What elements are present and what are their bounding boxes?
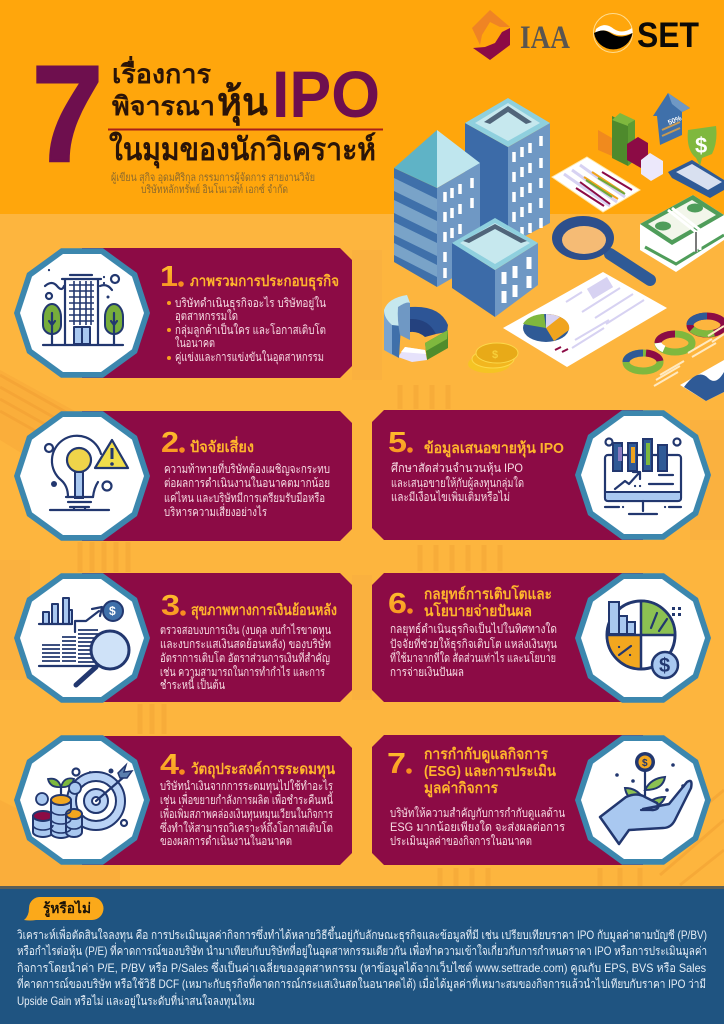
up arrow with 50% <box>653 93 690 145</box>
heading 7: การกำกับดูแลกิจการ <box>424 745 549 764</box>
front building <box>452 218 538 317</box>
number 3 <box>161 590 186 622</box>
icon: monitor with charts <box>575 410 711 540</box>
3D donut chart <box>384 295 448 362</box>
icon: office building <box>14 248 150 378</box>
pyramid-top building <box>394 130 480 287</box>
body 6: การจ่ายเงินปันผล <box>390 665 464 679</box>
panel: did you know footer <box>0 886 724 1024</box>
illustration: isometric city and finance objects <box>384 93 724 401</box>
icon: light bulb with warning <box>14 411 150 541</box>
body 5: และมีเงื่อนไขเพิ่มเติมหรือไม่ <box>391 488 510 504</box>
title: พิจารณา <box>112 91 215 121</box>
heading 5: ข้อมูลเสนอขายหุ้น IPO <box>424 440 564 458</box>
body 7: ESG มากน้อยเพียงใด จะส่งผลต่อการ <box>390 820 565 834</box>
SET logo <box>594 14 699 55</box>
body 5 <box>391 461 524 504</box>
heading 7 <box>424 745 557 798</box>
number 1 <box>160 261 184 293</box>
title: เรื่องการ <box>112 55 211 89</box>
body 7: บริษัทให้ความสำคัญกับการกำกับดูแลด้าน <box>390 806 565 821</box>
body 2 <box>164 460 330 519</box>
money stack <box>640 195 724 272</box>
body 4: ของผลการดำเนินงานในอนาคต <box>160 834 292 848</box>
number 5 <box>388 427 413 459</box>
heading 2: ปัจจัยเสี่ยง <box>190 436 254 456</box>
number 7 <box>387 748 412 780</box>
report with pie <box>503 272 667 367</box>
body text: Upside Gain หรือไม่ และอยู่ในระดับที่น่าสนใจลงทุนไหม <box>17 992 255 1009</box>
number 4: 4 <box>160 749 179 781</box>
title <box>32 38 383 191</box>
number 7: 7 <box>387 748 406 780</box>
small donuts <box>626 316 724 401</box>
title: IPO <box>272 57 380 131</box>
title: หุ้น <box>217 81 268 126</box>
heading 7: มูลค่ากิจการ <box>424 779 499 798</box>
body 6: กลยุทธ์ดำเนินธุรกิจเป็นไปในทิศทางใด <box>390 621 557 637</box>
heading 1: ภาพรวมการประกอบธุรกิจ <box>190 272 339 291</box>
panel: 2 risk factors <box>14 411 352 541</box>
icon: hand holding plant: $ <box>642 758 648 769</box>
IAA logo: IAA <box>520 20 570 56</box>
body 7: ประเมินมูลค่าของกิจการในอนาคต <box>390 834 532 849</box>
panel: 4 use of proceeds <box>14 735 352 865</box>
body 3 <box>160 623 331 692</box>
heading 6 <box>424 584 552 620</box>
panel: 6 growth strategy and dividend <box>372 573 711 703</box>
body 7 <box>390 806 565 849</box>
body text <box>17 926 707 1009</box>
coins: $ <box>492 349 498 361</box>
body 2: บริหารความเสี่ยงอย่างไร <box>164 503 267 519</box>
body 5: ศึกษาสัดส่วนจำนวนหุ้น IPO <box>391 461 523 476</box>
heading 3: สุขภาพทางการเงินย้อนหลัง <box>191 601 337 620</box>
icon: pie chart with coin <box>575 573 711 703</box>
heading 4: วัตถุประสงค์การระดมทุน <box>191 760 336 779</box>
bullets: บริษัทดำเนินธุรกิจอะไร บริษัทอยู่ใน <box>175 296 326 311</box>
author: บริษัทหลักทรัพย์ อินโนเวสท์ เอกซ์ จำกัด <box>141 182 288 196</box>
bullets: กลุ่มลูกค้าเป็นใคร และโอกาสเติบโต <box>175 322 326 338</box>
body 4: บริษัทนำเงินจากการระดมทุนไปใช้ทำอะไร <box>160 779 333 794</box>
body 6: ปัจจัยที่ช่วยให้ธุรกิจเติบโต แหล่งเงินทุน <box>390 635 557 652</box>
body 5: และเสนอขายให้กับผู้ลงทุนกลุ่มใด <box>391 476 524 491</box>
up arrow with 50%: 50% <box>667 115 683 127</box>
bullets: ในอนาคต <box>175 336 215 350</box>
panel: 7 ESG and valuation <box>372 735 711 865</box>
icon: pie chart with coin: $ <box>659 655 670 677</box>
panel: 1 business overview <box>14 248 352 378</box>
magnifier <box>552 216 650 280</box>
bar cubes <box>598 113 663 181</box>
tablet and dollar: $ <box>695 133 707 158</box>
body 6 <box>390 621 557 679</box>
body 3: ตรวจสอบงบการเงิน (งบดุล งบกำไรขาดทุน <box>160 623 331 638</box>
title: ในมุมของนักวิเคราะห์ <box>109 131 376 169</box>
body 3: ชำระหนี้ เป็นต้น <box>160 676 225 692</box>
body 3: เช่น ความสามารถในการทำกำไร และการ <box>160 665 325 679</box>
bullets <box>167 296 326 365</box>
body 2: ต่อผลการดำเนินงานในอนาคตมากน้อย <box>164 476 330 490</box>
body 6: ที่ใช้มาจากที่ใด สัดส่วนเท่าไร และนโยบาย <box>390 649 556 665</box>
number 3: 3 <box>161 590 180 622</box>
body 4: เพื่อเพิ่มสภาพคล่องเงินทุนหมุนเวียนในกิจการ <box>160 805 333 822</box>
body 4: ซึ่งทำให้สามารถวิเคราะห์ถึงโอกาสเติบโต <box>160 819 333 835</box>
number 6: 6 <box>388 588 407 620</box>
bullets: อุตสาหกรรมใด <box>175 309 238 324</box>
heading 7: (ESG) และการประเมิน <box>424 762 557 780</box>
number 6 <box>388 588 413 620</box>
number 1: 1 <box>160 261 178 293</box>
callout: did you know <box>24 897 104 920</box>
IAA logo <box>472 10 570 60</box>
title: 7 <box>32 38 103 191</box>
body 3: และงบกระแสเงินสดย้อนหลัง) ของบริษัท <box>160 637 331 651</box>
body 2: แค่ไหน และบริษัทมีการเตรียมรับมือหรือ <box>164 491 325 505</box>
callout: did you know: รู้หรือไม่ <box>43 899 91 917</box>
tablet and dollar <box>668 126 724 198</box>
tall back building <box>465 98 550 245</box>
body 4 <box>160 779 333 848</box>
bullets: คู่แข่งและการแข่งขันในอุตสาหกรรม <box>175 350 324 365</box>
author <box>111 171 315 196</box>
number 4 <box>160 749 185 781</box>
icon: target and coin stacks <box>14 735 150 865</box>
number 5: 5 <box>388 427 407 459</box>
icon: stacks with magnifier <box>14 573 150 703</box>
number 2: 2 <box>161 427 179 459</box>
panel: 5 IPO offering data <box>372 410 711 540</box>
author: ผู้เขียน สุกิจ อุดมศิริกุล กรรมการผู้จัดการ สายงานวิจัย <box>111 171 315 184</box>
icon: hand holding plant <box>575 735 711 865</box>
icon: stacks with magnifier: $ <box>109 604 116 618</box>
heading 6: กลยุทธ์การเติบโตและ <box>424 584 552 604</box>
coins <box>468 343 518 373</box>
SET logo: SET <box>637 16 699 55</box>
number 2 <box>161 427 185 459</box>
body 4: เช่น เพื่อขยายกำลังการผลิต เพื่อชำระคืนหนี้ <box>160 791 333 807</box>
body 3: อัตราการเติบโต อัตราส่วนการเงินที่สำคัญ <box>160 649 330 665</box>
panel: 3 historical financials <box>14 573 352 703</box>
chart sheet <box>552 157 640 212</box>
body 2: ความท้าทายที่บริษัทต้องเผชิญจะกระทบ <box>164 460 330 476</box>
heading 6: นโยบายจ่ายปันผล <box>424 601 532 620</box>
